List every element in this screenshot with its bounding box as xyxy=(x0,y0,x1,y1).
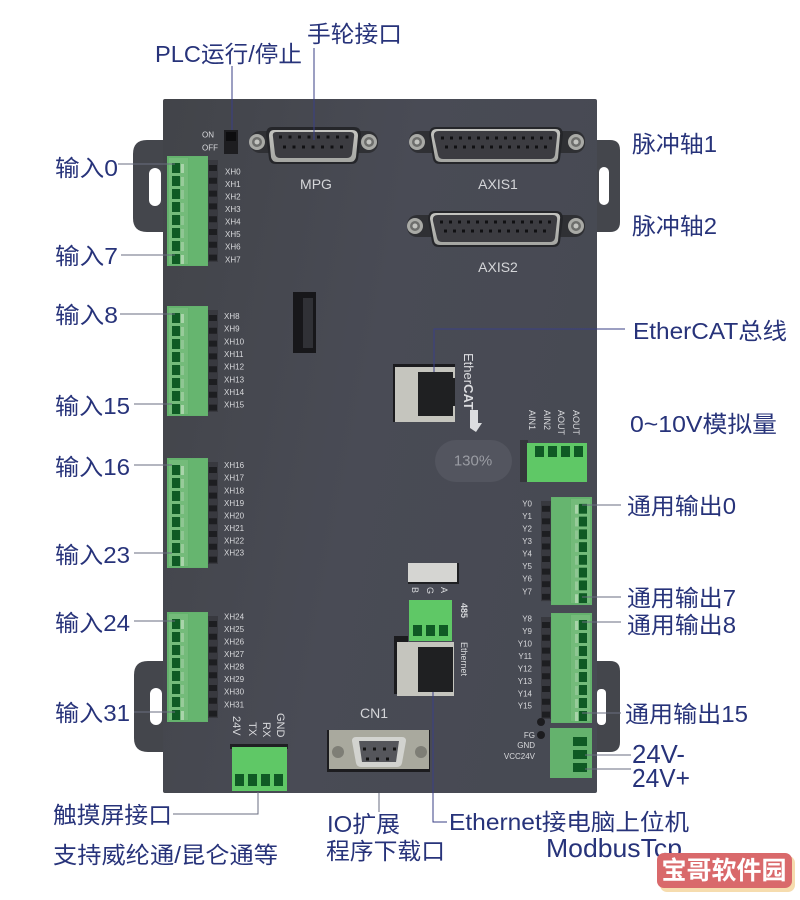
pin labels Y0-Y7: Y4 xyxy=(522,550,533,558)
pin labels Y0-Y7: Y3 xyxy=(522,537,533,546)
power terminal block xyxy=(537,718,592,778)
pin labels XH0-XH7: XH0 xyxy=(225,168,241,176)
pin labels Y8-Y15: Y8 xyxy=(522,614,533,624)
mounting tabs xyxy=(133,140,620,752)
pin labels Y0-Y7: Y1 xyxy=(522,512,533,521)
pin labels XH0-XH7: XH4 xyxy=(225,218,241,226)
485 terminal labels: Ethernet xyxy=(459,642,469,677)
pin labels XH24-XH31: XH27 xyxy=(224,650,245,659)
pin labels Y8-Y15: Y12 xyxy=(518,664,533,674)
left input labels xyxy=(55,155,130,726)
connector: AXIS2 xyxy=(407,211,585,247)
touch-screen terminal labels: RX xyxy=(260,722,272,738)
pin labels XH8-XH15: XH15 xyxy=(224,400,245,410)
right labels: 通用输出7 xyxy=(627,585,736,611)
left input labels: 输入23 xyxy=(55,542,130,568)
pin labels Y0-Y7: Y0 xyxy=(522,500,533,508)
terminal block Y0-Y7 xyxy=(541,497,592,605)
internal black header xyxy=(293,292,316,353)
label: PLC run/stop: PLC运行/停止 xyxy=(155,41,302,67)
right labels: 通用输出15 xyxy=(625,701,748,727)
analog terminal block xyxy=(520,440,587,482)
left input labels: 输入15 xyxy=(55,393,130,419)
label: handwheel port: 手轮接口 xyxy=(307,21,402,47)
pin labels Y0-Y7: Y6 xyxy=(522,574,533,584)
pin labels XH16-XH23: XH21 xyxy=(224,524,245,533)
EtherCAT logo: Ether CAT xyxy=(461,353,476,410)
485 terminal block xyxy=(409,600,452,641)
touch-screen terminal block xyxy=(230,744,288,791)
right labels: 24V- xyxy=(632,739,685,769)
right labels: 脉冲轴1 xyxy=(632,131,717,157)
pin labels Y0-Y7 xyxy=(522,500,533,596)
controller board xyxy=(163,99,597,793)
DIP switch: ON xyxy=(202,130,214,140)
leader lines xyxy=(118,48,631,822)
pin labels XH8-XH15: XH14 xyxy=(224,388,245,397)
terminal block XH0-XH7 xyxy=(167,156,218,266)
connector label: CN1: CN1 xyxy=(360,705,388,721)
pin labels XH0-XH7 xyxy=(225,168,241,264)
label: AXIS2: AXIS2 xyxy=(478,259,518,275)
pin labels XH8-XH15: XH12 xyxy=(224,362,245,372)
pin labels Y8-Y15: Y13 xyxy=(518,677,533,686)
pin labels Y8-Y15: Y14 xyxy=(518,690,533,698)
pin labels XH8-XH15: XH9 xyxy=(224,324,240,334)
pin labels Y8-Y15: Y10 xyxy=(518,640,533,648)
pin labels XH8-XH15 xyxy=(224,312,245,410)
pin labels Y0-Y7: Y7 xyxy=(522,588,533,596)
pin labels XH0-XH7: XH7 xyxy=(225,256,241,264)
label: IO expansion: IO扩展 xyxy=(327,811,400,837)
pin labels XH24-XH31 xyxy=(224,612,245,710)
pin labels XH16-XH23: XH16 xyxy=(224,461,245,470)
power pin labels: GND xyxy=(517,741,535,750)
label: ModbusTcp: ModbusTcp xyxy=(546,833,682,863)
connector: MPG xyxy=(249,127,378,164)
connector: AXIS1 xyxy=(409,127,585,164)
label: program download: 程序下载口 xyxy=(326,838,445,864)
pin labels XH16-XH23: XH18 xyxy=(224,486,245,496)
left input labels: 输入16 xyxy=(55,454,130,480)
right labels: 0~10V模拟量 xyxy=(630,411,777,437)
analog terminal labels: AIN1 xyxy=(527,410,537,430)
terminal block XH24-XH31 xyxy=(167,612,218,722)
pin labels XH0-XH7: XH1 xyxy=(225,180,241,189)
pin labels XH16-XH23: XH23 xyxy=(224,548,245,558)
EtherCAT RJ45 port xyxy=(393,364,455,422)
pin labels XH24-XH31: XH24 xyxy=(224,612,245,622)
485 terminal labels: A xyxy=(439,587,449,593)
Ethernet RJ45 port xyxy=(394,636,454,696)
terminal block XH8-XH15 xyxy=(167,306,218,416)
right labels: 脉冲轴2 xyxy=(632,213,717,239)
analog terminal labels: AOUT xyxy=(571,410,581,436)
EtherCAT logo xyxy=(461,353,482,432)
pin labels XH24-XH31: XH25 xyxy=(224,625,245,634)
label: AXIS1: AXIS1 xyxy=(478,176,518,192)
left input labels: 输入7 xyxy=(55,243,118,269)
pin labels XH24-XH31: XH31 xyxy=(224,700,245,710)
pin labels XH8-XH15: XH10 xyxy=(224,338,245,346)
pin labels XH16-XH23 xyxy=(224,461,245,558)
touch-screen terminal labels: TX xyxy=(246,722,258,737)
485 terminal labels: G xyxy=(425,587,435,594)
DIP switch: OFF xyxy=(202,144,218,152)
pin labels Y0-Y7: Y5 xyxy=(522,562,533,571)
label: supported HMI brands: 支持威纶通/昆仑通等 xyxy=(53,842,278,868)
touch-screen terminal labels: GND xyxy=(274,713,286,738)
DIP switch xyxy=(202,130,238,154)
pin labels XH0-XH7: XH2 xyxy=(225,192,241,202)
terminal block XH16-XH23 xyxy=(167,458,218,568)
power pin labels: VCC24V xyxy=(504,752,536,761)
zoom badge: 130% xyxy=(454,452,492,470)
power pin labels xyxy=(504,731,536,761)
analog terminal labels xyxy=(527,410,581,436)
pin labels XH16-XH23: XH19 xyxy=(224,499,245,508)
pin labels XH0-XH7: XH6 xyxy=(225,242,241,252)
touch-screen terminal labels xyxy=(230,713,286,738)
right labels: 通用输出0 xyxy=(627,493,736,519)
zoom badge xyxy=(435,440,512,482)
pin labels XH8-XH15: XH13 xyxy=(224,376,245,384)
watermark badge xyxy=(657,853,795,892)
pin labels XH16-XH23: XH20 xyxy=(224,512,245,520)
pin labels XH16-XH23: XH22 xyxy=(224,536,245,546)
pin labels XH8-XH15: XH8 xyxy=(224,312,240,321)
label: MPG: MPG xyxy=(300,176,332,192)
analog terminal labels: AIN2 xyxy=(542,410,552,430)
pin labels XH0-XH7: XH5 xyxy=(225,230,241,239)
pin labels Y8-Y15: Y9 xyxy=(522,627,533,636)
white 485 connector xyxy=(408,563,459,584)
right labels: 24V+ xyxy=(632,763,690,793)
watermark badge: 宝哥软件园 xyxy=(661,857,787,885)
connector: CN1 DB9 xyxy=(327,730,430,772)
485 terminal labels xyxy=(410,587,469,677)
485 terminal labels: B xyxy=(410,587,420,593)
left input labels: 输入31 xyxy=(55,700,130,726)
left input labels: 输入24 xyxy=(55,610,130,636)
pin labels Y0-Y7: Y2 xyxy=(522,524,533,534)
485 terminal labels: 485 xyxy=(459,603,469,618)
left input labels: 输入8 xyxy=(55,302,118,328)
power pin labels: FG xyxy=(524,731,535,740)
terminal block Y8-Y15 xyxy=(541,613,592,723)
label: touch-screen port: 触摸屏接口 xyxy=(53,802,172,828)
pin labels Y8-Y15 xyxy=(518,614,533,710)
pin labels Y8-Y15: Y15 xyxy=(518,702,533,710)
pin labels XH24-XH31: XH26 xyxy=(224,638,245,646)
pin labels XH0-XH7: XH3 xyxy=(225,205,241,214)
analog terminal labels: AOUT xyxy=(556,410,566,436)
label: Ethernet to PC: Ethernet接电脑上位机 xyxy=(449,809,689,835)
pin labels Y8-Y15: Y11 xyxy=(518,652,533,661)
pin labels XH24-XH31: XH28 xyxy=(224,662,245,672)
left input labels: 输入0 xyxy=(55,155,118,181)
right labels: EtherCAT总线 xyxy=(633,318,787,344)
right labels: 通用输出8 xyxy=(627,612,736,638)
right labels xyxy=(625,131,787,793)
pin labels XH24-XH31: XH29 xyxy=(224,675,245,684)
pin labels XH24-XH31: XH30 xyxy=(224,688,245,696)
touch-screen terminal labels: 24V xyxy=(230,716,242,736)
pin labels XH16-XH23: XH17 xyxy=(224,474,245,482)
pin labels XH8-XH15: XH11 xyxy=(224,350,244,359)
